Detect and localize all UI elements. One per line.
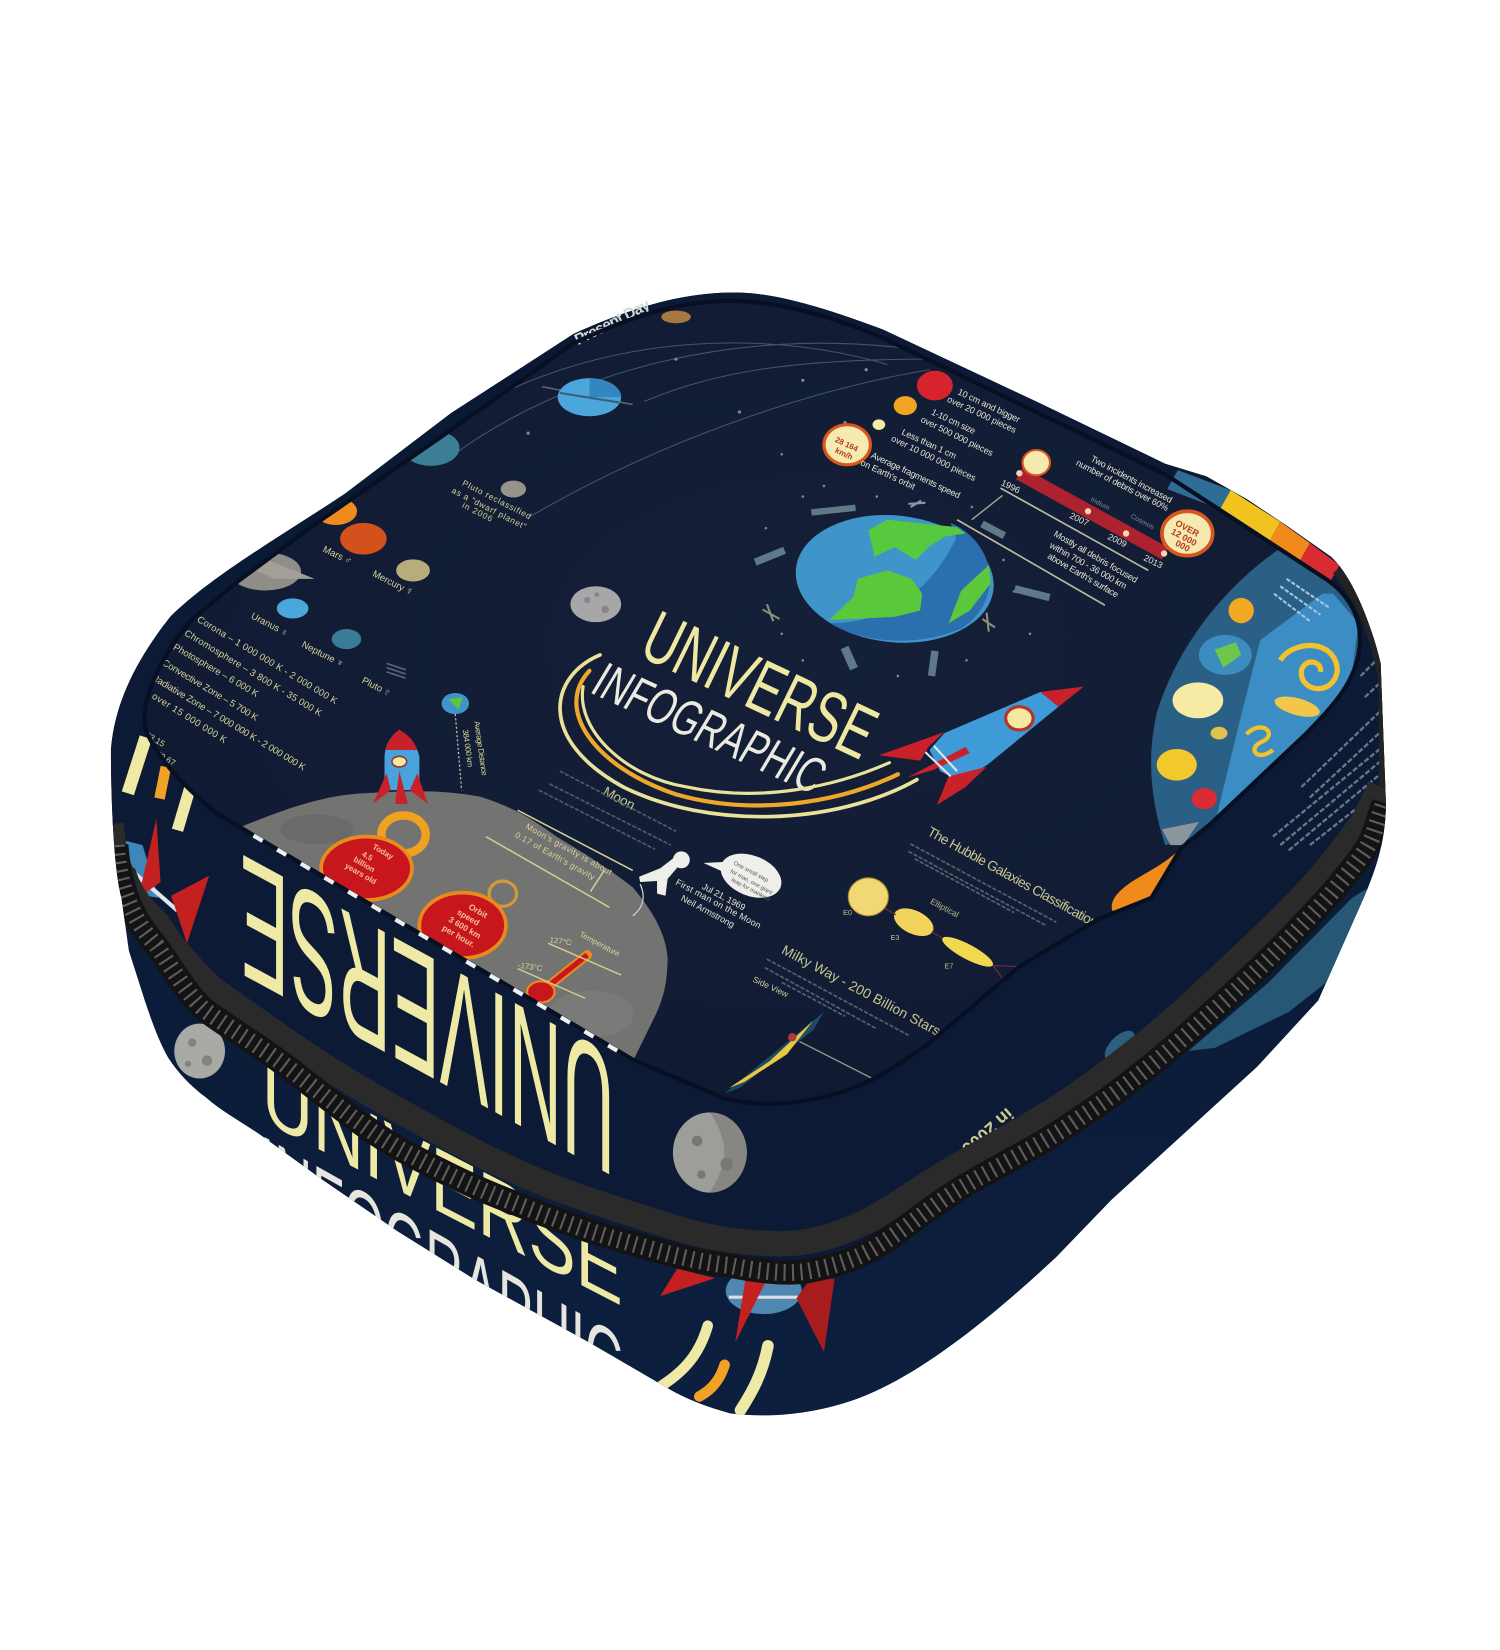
timeline bar chart: Iridium <box>1089 496 1111 512</box>
speech bubble: for man, one giant <box>729 869 773 896</box>
timeline bar chart: 2013 <box>1142 553 1164 570</box>
curved arrow <box>633 884 643 916</box>
heading: Hubble classification: The Hubble Galaxies Classification <box>925 824 1100 930</box>
speed badge: km/h <box>834 446 854 462</box>
chart: galaxy ellipses: E0 <box>843 908 852 917</box>
debris text: Less than 1 cm <box>900 427 958 461</box>
timeline bar chart: 000 <box>1174 538 1192 554</box>
upside-down UNIVERSE lettering: UNIVERSE <box>240 816 615 1216</box>
icon: Mercury <box>396 559 430 582</box>
lower rocket fins <box>660 1268 835 1352</box>
icon: Earth <box>789 505 1000 652</box>
icon: rocket flame <box>1112 848 1181 917</box>
icon: Pluto grey planet <box>501 481 526 498</box>
icon: big rocket <box>879 687 1084 805</box>
chart: galaxy ellipses <box>843 878 1019 982</box>
text: average distance: 384 000 km <box>461 729 475 768</box>
icon: orange planet <box>322 502 358 525</box>
lower swoosh stripes <box>661 1326 768 1410</box>
timeline bar chart: Cosmos <box>1129 513 1155 531</box>
lower INFOGRAPHIC lettering: INFOGRAPHIC <box>260 1115 623 1420</box>
text: debris notes: number of debris over 60% <box>1074 458 1170 513</box>
heading: Milky Way: Milky Way - 200 Billion Stars <box>779 942 943 1039</box>
text: temperature labels: -173°C <box>517 961 543 973</box>
timeline bar chart: 12 000 <box>1169 526 1198 548</box>
text: sun temperature list: Chromosphere – 3 800 K - 35 000 K <box>182 628 324 719</box>
label: Mars: Mars ♂ <box>321 544 354 567</box>
icon: Neptune small <box>332 629 361 649</box>
panel: lid top <box>149 320 1358 1093</box>
icon: small Earth with distance line <box>442 693 469 790</box>
kettlebell weight 1: billion <box>352 855 377 874</box>
text: Present Day at rim: Present Day <box>572 296 653 349</box>
text: Pluto reclassified: in 2006 <box>461 500 495 524</box>
caption lines: Hubble <box>908 844 1056 925</box>
icon: Uranus planet with ring <box>542 378 633 416</box>
title: INFOGRAPHIC: INFOGRAPHIC <box>582 653 836 805</box>
icon: side moon <box>673 1112 747 1193</box>
text: debris notes: Two incidents increased <box>1089 453 1174 505</box>
lower UNIVERSE lettering: UNIVERSE <box>262 1039 623 1327</box>
text: sun temperature list: Radiative Zone – 7 000 000 K - 2 000 000 K <box>150 672 308 774</box>
text: Pluto reclassified: Pluto reclassified <box>461 478 533 521</box>
label: Uranus: Uranus ♁ <box>249 611 290 639</box>
thermometer <box>527 955 587 1002</box>
title swoosh arcs <box>560 655 917 817</box>
icon: yellow sliver <box>1347 946 1360 974</box>
text: sun temperature list: Corona – 1 000 000 K - 2 000 000 K <box>195 614 340 707</box>
text: temperature labels: 127°C <box>549 935 572 947</box>
icon: small moon <box>174 1024 225 1079</box>
debris text: 10 cm and bigger <box>956 387 1022 424</box>
text: moon landing note: Jul 21, 1969 <box>700 881 747 912</box>
icon: teal planet <box>410 434 460 466</box>
debris text: 1-10 cm size <box>930 407 977 436</box>
icon: brown planet at rim <box>661 311 691 323</box>
gravity annotation lines <box>486 810 633 907</box>
timeline bar chart: 2009 <box>1106 532 1128 549</box>
kettlebell weight 2: speed <box>455 907 481 928</box>
left swoosh stripes <box>128 737 191 830</box>
kettlebell weight 1: years old <box>343 861 378 886</box>
zipper teeth highlights <box>116 803 1384 1272</box>
icon: small rocket <box>373 730 428 804</box>
label: Pluto: Pluto ♇ <box>360 675 393 699</box>
panel: lower side print below zipper <box>174 887 1369 1420</box>
text: Moon heading: Moon <box>601 784 638 813</box>
kettlebell weight 2 <box>419 881 517 958</box>
timeline bar chart <box>957 450 1213 605</box>
icons: satellites <box>754 501 1050 677</box>
zipper <box>111 570 1384 1272</box>
text: sun temperature list <box>139 614 340 774</box>
colourful rim print top right <box>1167 470 1339 584</box>
debris text: over 10 000 000 pieces <box>890 433 978 483</box>
panel: space debris legend <box>824 371 1022 500</box>
temperature lines <box>518 943 621 998</box>
timeline bar chart: 2007 <box>1068 510 1090 528</box>
kettlebell weight 2: per hour. <box>441 923 477 949</box>
text: Moon gravity: Moon's gravity is about <box>524 821 614 877</box>
text: temperature labels: Temperature <box>578 930 622 959</box>
flipped caption in 2006: in 2006 <box>958 1104 1017 1159</box>
white seam stitching over moon <box>254 836 623 1054</box>
kettlebell weight 1: 4.5 <box>360 850 375 863</box>
panel: blue universe timeline ellipse <box>1151 548 1363 845</box>
text: debris notes <box>1046 453 1174 600</box>
speed badge: 28 164 <box>834 435 860 454</box>
speech bubble: leap for mankind <box>730 877 771 903</box>
kettlebell weight 1 <box>321 815 426 900</box>
pouch body silhouette <box>111 293 1386 1415</box>
icon: astronaut <box>639 851 690 896</box>
debris text <box>859 387 1022 500</box>
timeline bar chart: OVER <box>1174 518 1201 539</box>
side panel printed text lines <box>1273 657 1384 850</box>
label: Mercury: Mercury ☿ <box>370 569 415 598</box>
zipper tape <box>111 787 1381 1244</box>
debris size dots <box>873 371 953 430</box>
panel: upper side band above zipper <box>111 292 1386 1193</box>
moon caption grey lines <box>539 771 676 849</box>
text: sun temperature list: 459.67 <box>150 746 178 768</box>
left rocket fins <box>121 819 209 943</box>
debris text: over 500 000 pieces <box>919 414 995 458</box>
text: sun temperature list: – over 15 000 000 K <box>142 686 229 746</box>
rim debris bar fragment <box>996 381 1144 458</box>
zipper right rim <box>1336 570 1384 813</box>
icon: Uranus small <box>277 598 308 618</box>
chart: galaxy ellipses: E7 <box>944 962 953 971</box>
caption lines: Milky Way <box>765 959 908 1035</box>
small teal planet edge <box>1104 1030 1134 1058</box>
kettlebell weight 1: Today <box>371 842 396 862</box>
timeline bar chart: 1996 <box>999 478 1022 495</box>
icon: Milky Way side view <box>725 1012 873 1093</box>
debris text: on Earth's orbit <box>859 458 917 492</box>
zipper teeth base <box>116 803 1384 1272</box>
debris text: Average fragments speed <box>870 450 962 500</box>
text: Moon gravity second line: 0.17 of Earth's gravity <box>513 830 598 882</box>
lower right teal planet edge <box>1188 887 1369 1051</box>
icon: Saturn <box>238 554 314 590</box>
text: moon landing note: Neil Armstrong <box>679 893 736 930</box>
chart: galaxy ellipses: E3 <box>890 933 900 942</box>
speech bubble <box>704 845 788 906</box>
text: average distance: Average Distance <box>472 721 489 777</box>
text: sun temperature list: 273.15 <box>139 727 167 749</box>
text: average distance <box>461 721 489 777</box>
title: UNIVERSE: UNIVERSE <box>630 597 889 775</box>
kettlebell weight 2: 3 600 km <box>447 914 483 941</box>
chart: galaxy ellipses: Elliptical <box>929 896 961 920</box>
star field <box>526 358 1032 678</box>
text: temperature labels <box>517 930 622 973</box>
small caption block <box>387 663 406 678</box>
kettlebell weight 2: Orbit <box>467 902 490 920</box>
speech bubble: One small step <box>732 861 769 884</box>
orbit lines <box>454 343 930 518</box>
icon: Mars <box>340 523 387 555</box>
flipped caption fragment: as a d <box>1004 1101 1055 1149</box>
text: sun temperature list: & Photosphere – 6 000 K <box>163 637 261 700</box>
text: sun temperature list: Convective Zone – 5 700 K <box>160 658 260 724</box>
label: side view: Side View <box>751 974 791 1000</box>
debris text: over 20 000 pieces <box>946 394 1018 435</box>
text: debris notes: above Earth's surface <box>1046 551 1120 600</box>
icon: moon small <box>570 586 621 622</box>
label: Neptune: Neptune ♆ <box>300 639 345 670</box>
text: debris notes: within 700 - 36 000 km <box>1047 540 1129 591</box>
text: debris notes: Mostly all debris focused <box>1052 529 1140 585</box>
lid seam shading <box>145 301 1360 1104</box>
text: moon landing note: First man on the Moon <box>674 877 763 931</box>
panel: big moon <box>217 791 668 1067</box>
speed badge <box>824 425 870 465</box>
text: Pluto reclassified: as a "dwarf planet" <box>450 485 528 531</box>
